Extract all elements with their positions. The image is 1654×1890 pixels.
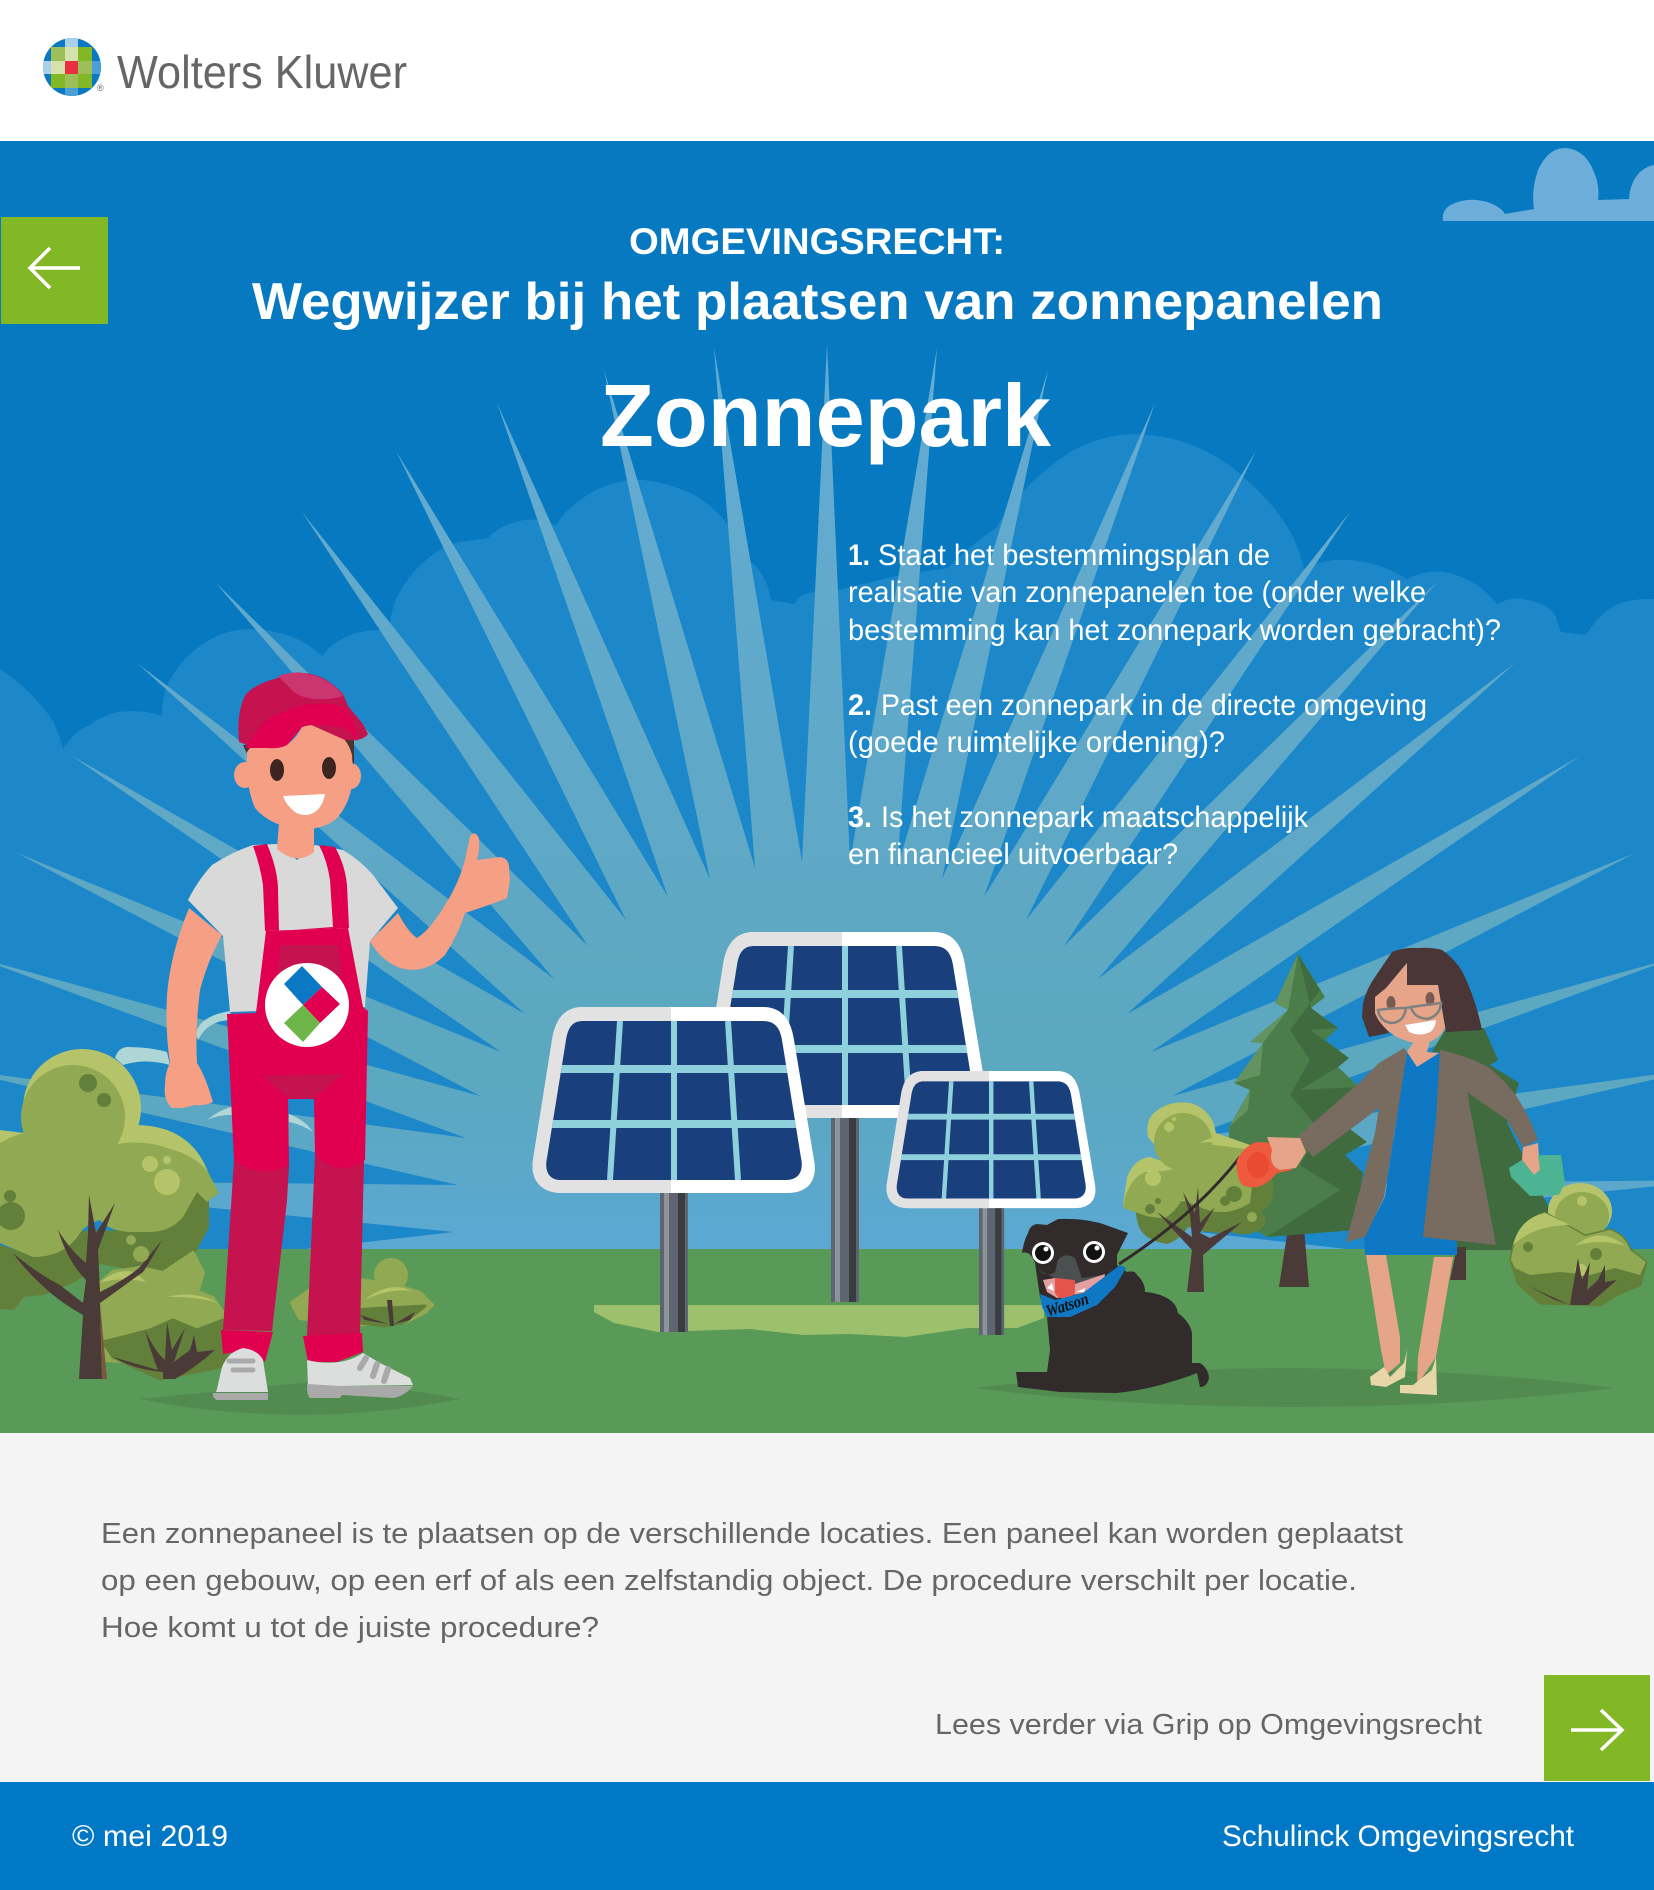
question 2: Past een zonnepark in de directe omgeving	[881, 689, 1427, 722]
cloud top right	[1443, 148, 1654, 221]
question 2: 2.	[848, 689, 872, 722]
woman smile	[1405, 1020, 1436, 1034]
woman cardigan	[1297, 1048, 1538, 1245]
man left arm	[165, 908, 222, 1108]
woman left hand	[1267, 1137, 1306, 1170]
man cap	[238, 672, 368, 748]
copyright: © mei 2019	[72, 1820, 228, 1853]
dog	[1016, 1219, 1209, 1393]
forward arrow	[1571, 1710, 1622, 1750]
overall pocket	[278, 945, 342, 975]
dog body	[1016, 1219, 1209, 1393]
leaves on branch	[126, 1235, 136, 1245]
man eyes	[270, 757, 336, 781]
pine main	[1229, 954, 1367, 1237]
dog teeth	[1047, 1283, 1085, 1292]
intro text: Hoe komt u tot de juiste procedure?	[101, 1612, 599, 1644]
bag	[1509, 1155, 1565, 1196]
panel: back	[704, 932, 986, 1118]
bush: far small	[292, 1258, 432, 1326]
pole: right panel	[979, 1208, 1004, 1335]
header	[43, 38, 406, 96]
intro text: Een zonnepaneel is te plaatsen op de verschillende locaties. Een paneel kan worden geplaatst	[101, 1518, 1403, 1550]
solar panels	[533, 932, 1095, 1335]
question 3: en financieel uitvoerbaar?	[848, 838, 1178, 871]
bush: middle	[1123, 1102, 1273, 1244]
pine behind woman	[1410, 1028, 1550, 1250]
dog mouth	[1043, 1274, 1105, 1298]
illustration panel	[0, 141, 1654, 1433]
pole: left panel	[660, 1193, 688, 1332]
subtitle: OMGEVINGSRECHT:	[629, 221, 1005, 262]
intro text: op een gebouw, op een erf of als een zelfstandig object. De procedure verschilt per locatie.	[101, 1565, 1357, 1597]
intro text	[101, 1518, 1403, 1644]
leash reel	[1236, 1142, 1292, 1187]
registered mark: ®	[97, 83, 104, 93]
shadow under man	[140, 1383, 460, 1415]
woman glasses	[1378, 1003, 1441, 1023]
back button	[1, 217, 108, 324]
panel: left	[533, 1007, 815, 1193]
middle tree trunk	[1157, 1187, 1242, 1292]
man neck	[277, 822, 314, 858]
man right shoe	[307, 1353, 413, 1398]
back arrow	[30, 248, 80, 288]
pole: back panel	[831, 1117, 859, 1302]
dog eyes	[1032, 1241, 1105, 1264]
dog tongue	[1055, 1278, 1075, 1299]
woman face	[1375, 963, 1445, 1043]
dog muzzle	[1038, 1255, 1103, 1285]
bush: lower	[100, 1253, 230, 1365]
question 3: 3.	[848, 801, 872, 834]
publication name: Schulinck Omgevingsrecht	[1222, 1820, 1575, 1853]
forward button	[1544, 1675, 1650, 1781]
question 2	[848, 689, 1427, 759]
dog name tag: Watson	[1043, 1289, 1091, 1321]
question 1	[848, 539, 1501, 647]
bush: main body	[0, 1065, 219, 1257]
background clouds	[0, 434, 1654, 1249]
pine trunk	[1279, 1228, 1309, 1287]
light grass patch	[594, 1305, 1044, 1337]
question 1: realisatie van zonnepanelen toe (onder welke	[848, 576, 1426, 609]
light swooshes	[115, 1011, 313, 1132]
intro panel	[0, 1433, 1654, 1782]
man	[165, 672, 510, 1400]
man overalls top	[253, 844, 349, 931]
man shirt	[188, 844, 398, 1012]
right pine trees and bushes	[1123, 954, 1646, 1305]
questions	[848, 539, 1501, 871]
bush: right	[1511, 1183, 1646, 1305]
woman eyes	[1386, 992, 1434, 1010]
logo globe	[43, 38, 101, 96]
leash	[1119, 1157, 1240, 1264]
pine trunk behind woman	[1450, 1247, 1466, 1280]
question 3: Is het zonnepark maatschappelijk	[881, 801, 1309, 834]
woman legs	[1366, 1255, 1453, 1385]
man lower legs	[223, 1156, 364, 1336]
man right arm	[370, 833, 510, 970]
dog collar	[1040, 1265, 1126, 1317]
chest logo	[265, 963, 349, 1047]
footer	[0, 1782, 1654, 1890]
woman right hand	[1522, 1143, 1540, 1175]
bush: back dark	[0, 1192, 207, 1308]
left tree and bushes	[0, 1049, 432, 1379]
question 1: bestemming kan het zonnepark worden gebracht)?	[848, 614, 1501, 647]
man left shoe	[213, 1348, 268, 1400]
question 2: (goede ruimtelijke ordening)?	[848, 726, 1225, 759]
woman dress	[1364, 1052, 1457, 1255]
bush: main rim	[0, 1049, 208, 1200]
tree trunk	[13, 1195, 162, 1379]
question 1: Staat het bestemmingsplan de	[878, 539, 1270, 572]
woman hair back	[1362, 948, 1482, 1037]
heading: Zonnepark: Zonnepark	[600, 366, 1052, 465]
panel: right	[887, 1071, 1095, 1208]
woman neck and chest	[1407, 1040, 1439, 1067]
question 1: 1.	[848, 539, 870, 572]
sun rays	[0, 344, 1654, 1300]
man smile	[283, 794, 325, 815]
sky	[0, 141, 1654, 1249]
bush: spots	[0, 1074, 180, 1230]
man ears	[234, 762, 361, 789]
small tree trunk	[113, 1322, 215, 1379]
man cuffs	[221, 1330, 363, 1362]
ground	[0, 1249, 1654, 1433]
question 3	[848, 801, 1309, 871]
man face	[247, 724, 353, 829]
woman shoes	[1370, 1350, 1437, 1395]
logo wordmark: Wolters Kluwer	[117, 46, 407, 98]
man hair	[243, 726, 354, 765]
shadow under woman and dog	[976, 1368, 1615, 1407]
man overalls body	[227, 928, 368, 1171]
woman	[1119, 948, 1565, 1395]
read more link: Lees verder via Grip op Omgevingsrecht	[935, 1709, 1482, 1741]
main title: Wegwijzer bij het plaatsen van zonnepanelen	[252, 273, 1383, 331]
